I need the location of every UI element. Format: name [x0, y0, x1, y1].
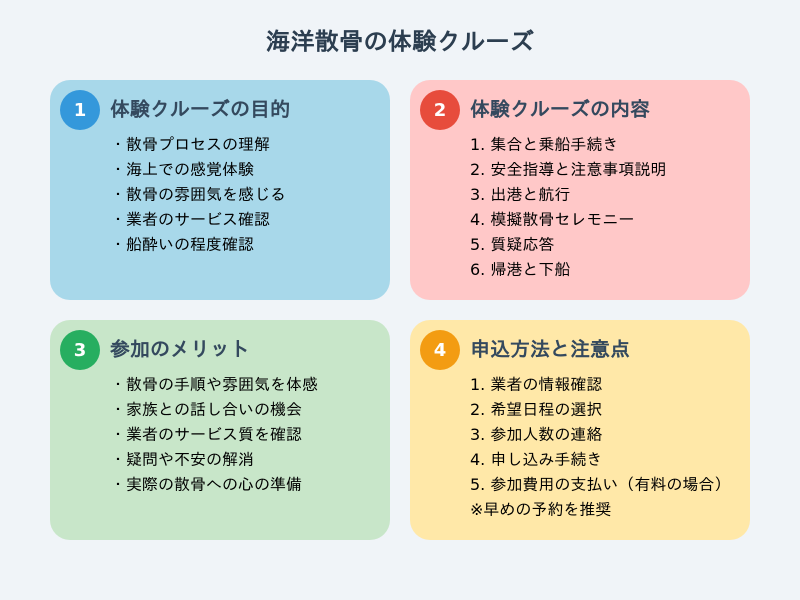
list: panel 2: 6. 帰港と下船 — [470, 260, 570, 279]
icon: number 2: 2 — [434, 100, 446, 121]
list: panel 4: 1. 業者の情報確認 — [470, 375, 602, 394]
list: panel 4: ※早めの予約を推奨 — [470, 500, 611, 519]
icon: number 3 — [60, 330, 100, 370]
list: panel 2: 3. 出港と航行 — [470, 185, 570, 204]
list: panel 3 — [110, 375, 318, 494]
list: panel 2: 2. 安全指導と注意事項説明 — [470, 160, 666, 179]
icon: number 3: 3 — [74, 340, 86, 361]
title: 海洋散骨の体験クルーズ — [266, 27, 535, 56]
list: panel 1: ・海上での感覚体験 — [110, 160, 254, 179]
icon: number 2 — [420, 90, 460, 130]
list: panel 4: 3. 参加人数の連絡 — [470, 425, 602, 444]
panel: 体験クルーズの目的 — [50, 80, 390, 300]
list: panel 2: 5. 質疑応答 — [470, 235, 554, 254]
panel: 体験クルーズの内容 — [410, 80, 750, 300]
list: panel 4: 5. 参加費用の支払い（有料の場合） — [470, 475, 730, 494]
list: panel 1: ・散骨の雰囲気を感じる — [110, 185, 286, 204]
list: panel 3: ・散骨の手順や雰囲気を体感 — [110, 375, 318, 394]
list: panel 2 — [470, 135, 666, 279]
list: panel 4 — [470, 375, 730, 519]
list: panel 4: 4. 申し込み手続き — [470, 450, 602, 469]
icon: number 4 — [420, 330, 460, 370]
icon: number 4: 4 — [434, 340, 446, 361]
list: panel 1: ・船酔いの程度確認 — [110, 235, 254, 254]
panel: 参加のメリット — [50, 320, 390, 540]
list: panel 2: 1. 集合と乗船手続き — [470, 135, 618, 154]
list: panel 3: ・実際の散骨への心の準備 — [110, 475, 302, 494]
list: panel 4: 2. 希望日程の選択 — [470, 400, 602, 419]
list: panel 1 — [110, 135, 286, 254]
icon: number 1 — [60, 90, 100, 130]
icon: number 1: 1 — [74, 100, 86, 121]
heading: panel 3: 参加のメリット — [110, 337, 250, 361]
list: panel 2: 4. 模擬散骨セレモニー — [470, 210, 634, 229]
list: panel 1: ・散骨プロセスの理解 — [110, 135, 270, 154]
list: panel 1: ・業者のサービス確認 — [110, 210, 270, 229]
list: panel 3: ・家族との話し合いの機会 — [110, 400, 302, 419]
list: panel 3: ・業者のサービス質を確認 — [110, 425, 302, 444]
heading: panel 2: 体験クルーズの内容 — [470, 97, 650, 121]
heading: panel 1: 体験クルーズの目的 — [110, 97, 290, 121]
list: panel 3: ・疑問や不安の解消 — [110, 450, 254, 469]
heading: panel 4: 申込方法と注意点 — [470, 337, 630, 361]
panel: 申込方法と注意点 — [410, 320, 750, 540]
